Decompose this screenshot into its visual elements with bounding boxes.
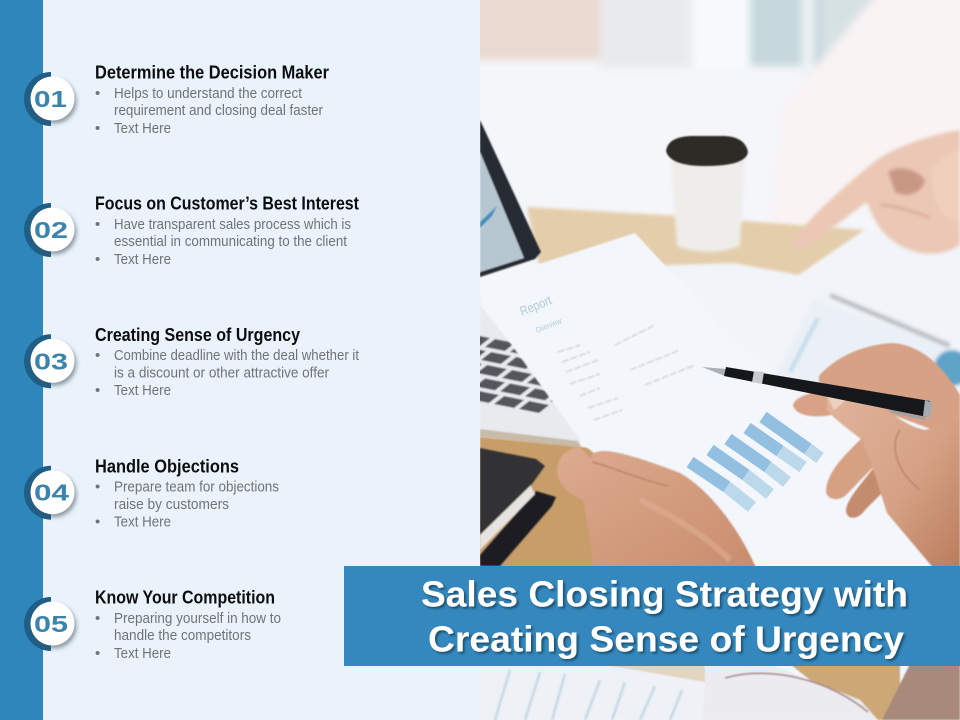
number badge 03: 03: [34, 348, 68, 374]
bullet list: Helps to understand the correct: [114, 85, 303, 102]
bullet list: •: [95, 216, 100, 233]
number badge 05: [24, 597, 75, 651]
bullet list: [95, 610, 281, 662]
bullet list: Text Here: [114, 120, 171, 137]
holding hand, left: [557, 447, 757, 570]
holding hand, right: [793, 343, 960, 570]
heading: Know Your Competition: [95, 588, 275, 608]
item 1: Determine the Decision Maker: [24, 63, 329, 137]
item 3: Creating Sense of Urgency: [24, 325, 360, 399]
bullet list: handle the competitors: [114, 627, 251, 644]
heading: Determine the Decision Maker: [95, 63, 329, 83]
photo background: blurred office: [480, 0, 876, 70]
pen: [702, 367, 933, 419]
photo: business people reviewing a report: [480, 0, 960, 720]
black notebook: [480, 448, 556, 566]
bullet list: •: [95, 347, 100, 364]
bullet list: Text Here: [114, 251, 171, 268]
report sheet: [480, 232, 666, 454]
laptop screen: [480, 120, 541, 277]
number badge 05: 05: [34, 611, 68, 637]
number badge 04: [24, 466, 75, 520]
item 5: Know Your Competition: [24, 588, 281, 662]
laptop base and keyboard: [480, 307, 582, 448]
item 2: Focus on Customer's Best Interest: [24, 194, 359, 268]
left sidebar: [0, 0, 43, 720]
bullet list: [95, 478, 279, 530]
desk, near side: [480, 437, 600, 570]
title: Creating Sense of Urgency: [428, 618, 904, 660]
bullet list: Text Here: [114, 514, 171, 531]
bullet list: •: [95, 85, 100, 102]
bullet list: •: [95, 382, 100, 399]
report text on sheet: Report: [518, 292, 554, 319]
report text on sheet: Overview: [534, 316, 563, 335]
bullet list: [95, 216, 351, 268]
heading: Creating Sense of Urgency: [95, 325, 300, 345]
bullet list: Text Here: [114, 382, 171, 399]
bullet list: •: [95, 120, 100, 137]
heading: Handle Objections: [95, 456, 239, 476]
number badge 01: 01: [34, 86, 67, 112]
heading: Focus on Customer’s Best Interest: [95, 194, 359, 214]
bullet list: •: [95, 479, 100, 496]
number badge 02: 02: [34, 217, 68, 243]
bullet list: Combine deadline with the deal whether it: [114, 347, 360, 364]
bullet list: [95, 347, 360, 399]
bullet list: Prepare team for objections: [114, 479, 279, 496]
title banner: [344, 566, 960, 666]
bullet list: essential in communicating to the client: [114, 233, 348, 250]
number badge 01: [24, 72, 75, 126]
item 4: Handle Objections: [24, 456, 279, 530]
report table lines: [558, 325, 695, 420]
photo below banner: spreadsheet and sleeve: [493, 666, 960, 720]
desk, far side: [527, 207, 865, 276]
bullet list: •: [95, 251, 100, 268]
report text on sheet: [520, 296, 562, 332]
number badge 03: [24, 334, 75, 388]
photo: paper and clipboard on the desk: [686, 236, 960, 390]
number badge 04: 04: [34, 480, 69, 506]
title: Sales Closing Strategy with: [421, 574, 908, 614]
bullet list: •: [95, 514, 100, 531]
bullet list: [95, 85, 323, 137]
bullet list: Have transparent sales process which is: [114, 216, 351, 233]
bar chart on sheet: [690, 417, 820, 507]
pointing hand: [794, 130, 960, 254]
bullet list: Text Here: [114, 645, 171, 662]
title: [421, 574, 908, 660]
icon: coffee cup: [666, 136, 748, 252]
bullet list: •: [95, 610, 100, 627]
bullet list: requirement and closing deal faster: [114, 102, 323, 119]
bullet list: •: [95, 645, 100, 662]
bullet list: Preparing yourself in how to: [114, 610, 281, 627]
bullet list: is a discount or other attractive offer: [114, 364, 329, 381]
bullet list: raise by customers: [114, 496, 229, 513]
number badge 02: [24, 203, 75, 257]
